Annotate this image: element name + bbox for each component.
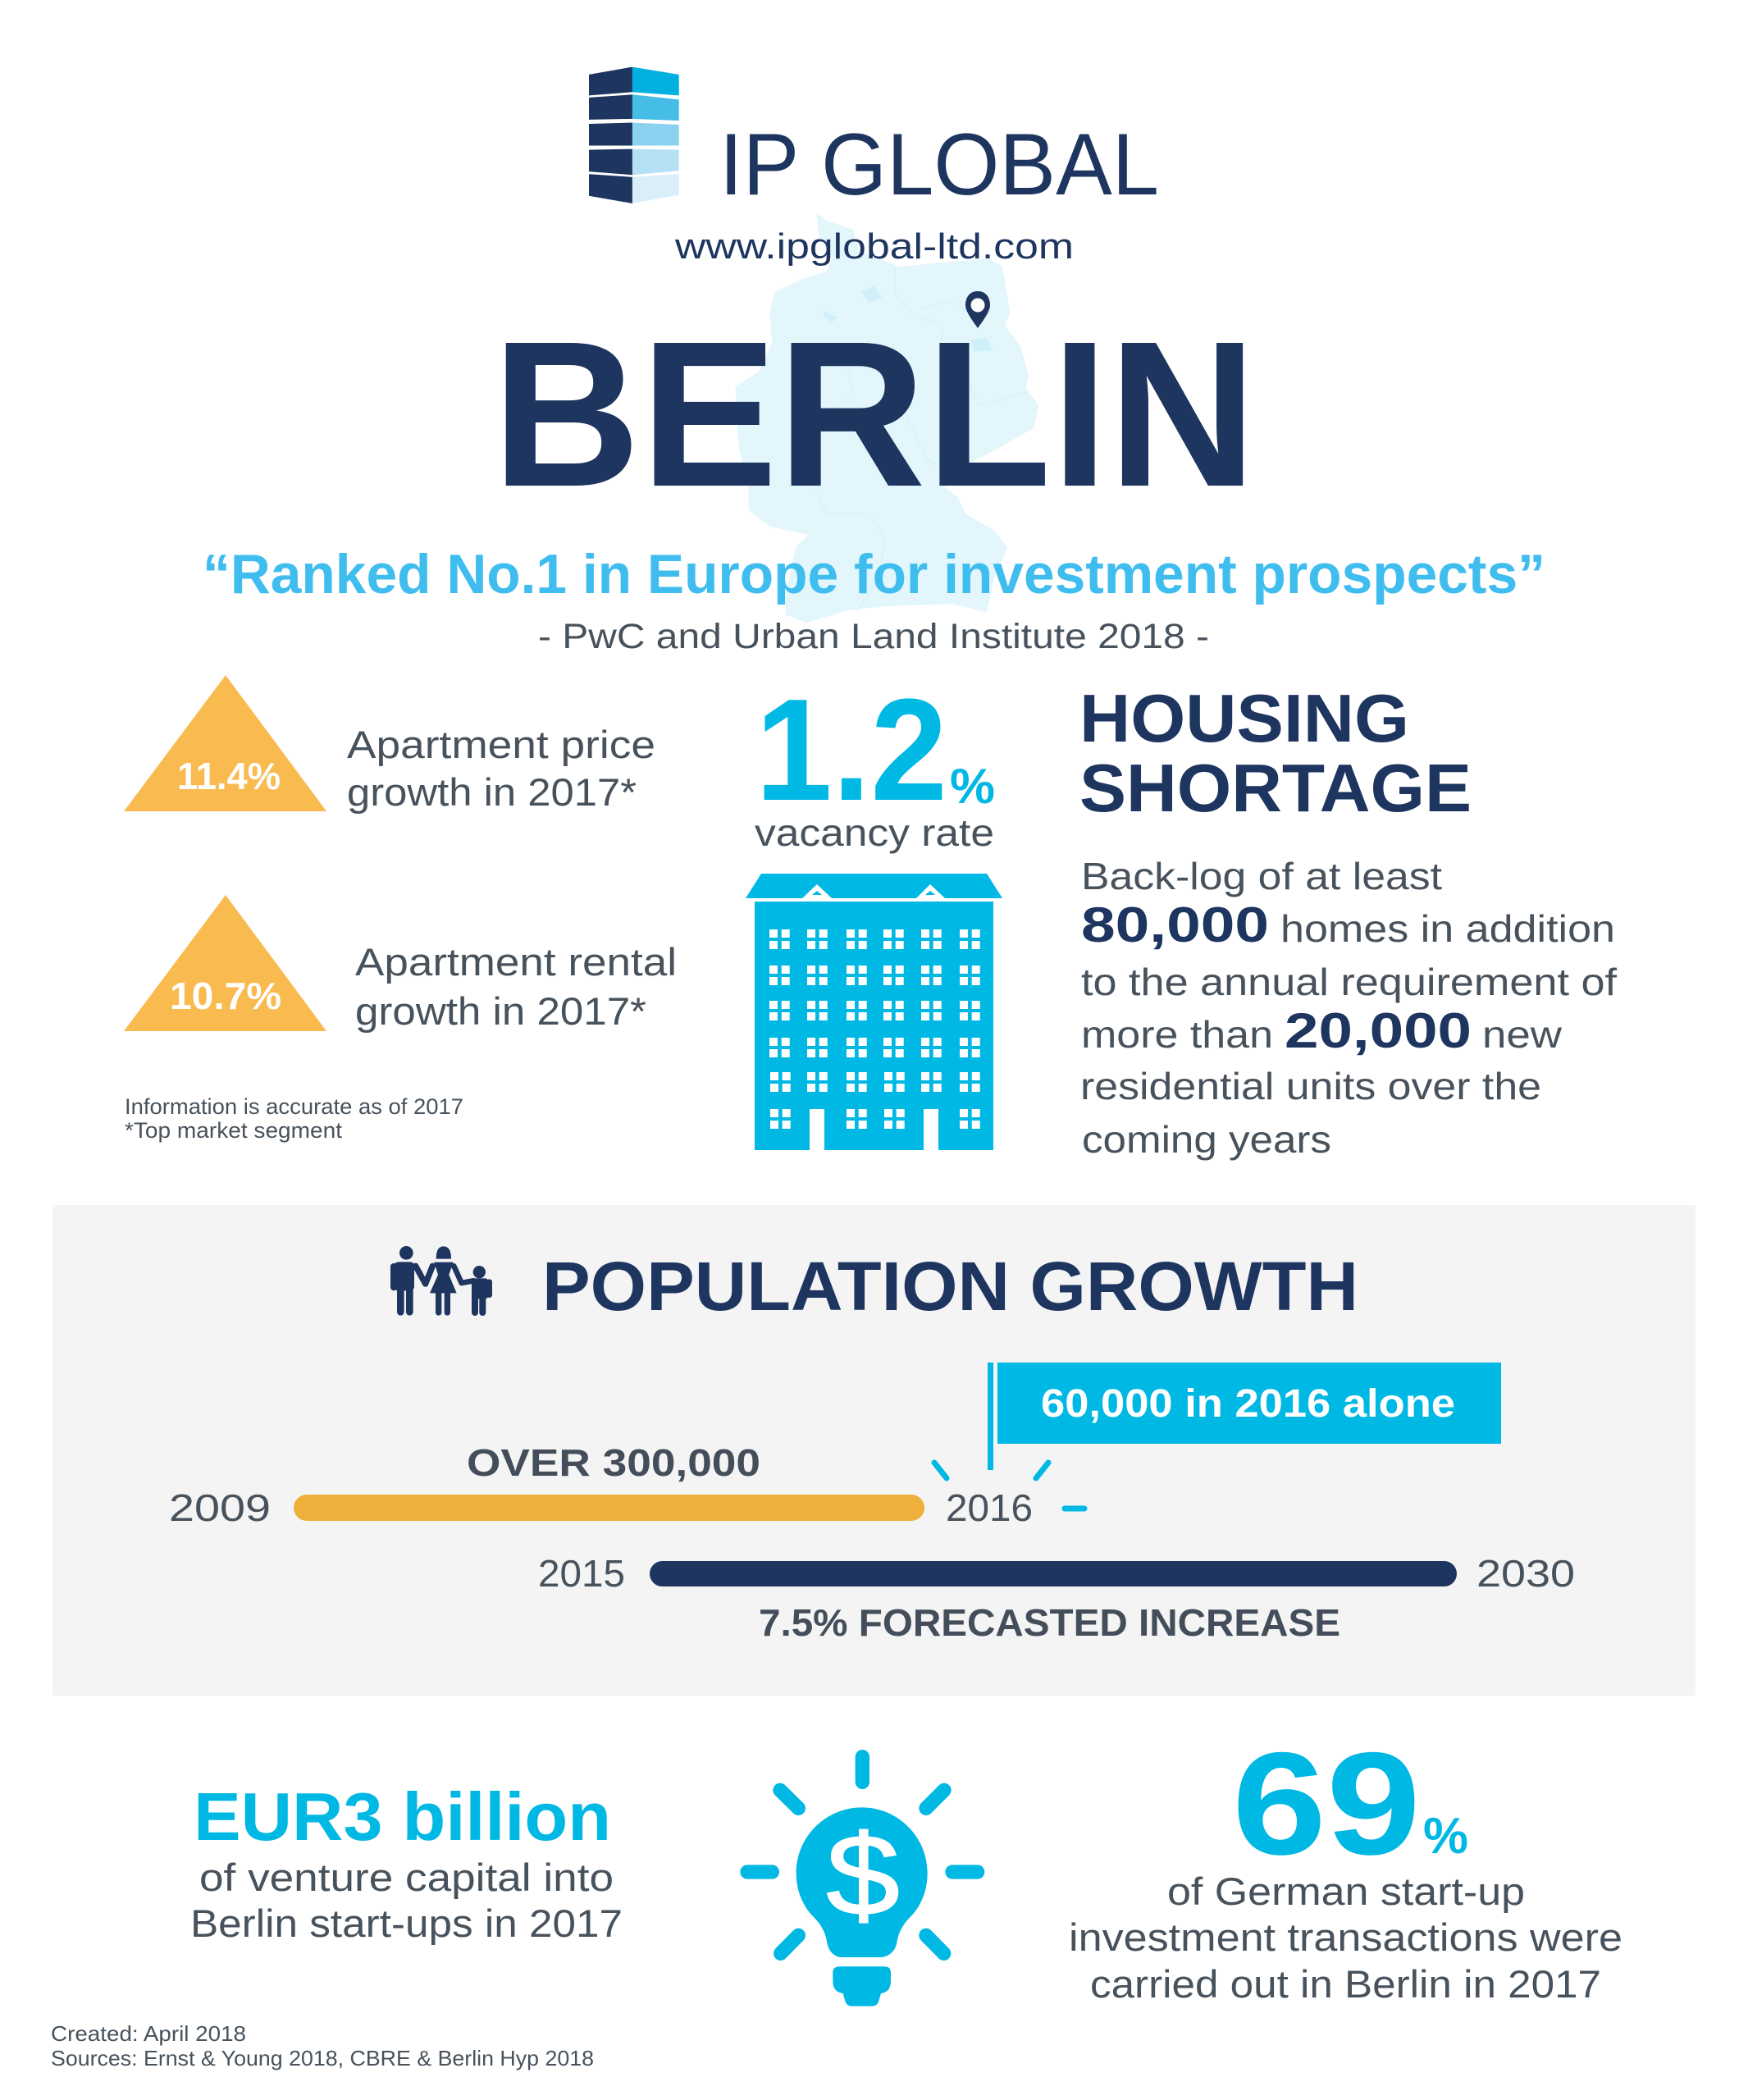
text block: housing shortage body: 80,000 — [1081, 897, 1269, 952]
stat: venture capital: EUR3 billion — [194, 1778, 611, 1855]
footnote — [125, 1094, 463, 1143]
timeline: 2015 to 2030: 2015 — [538, 1552, 625, 1595]
timeline: 2015 to 2030: 7.5% FORECASTED INCREASE — [759, 1601, 1340, 1644]
stat: German start-up share: of German start-up — [1167, 1869, 1525, 1913]
stat: German start-up share: investment transactions were — [1069, 1915, 1622, 1959]
heading: housing shortage: HOUSING — [1079, 680, 1409, 756]
flag: 60,000 in 2016 alone — [988, 1363, 1501, 1470]
stat: venture capital: of venture capital into — [199, 1856, 614, 1899]
panel: population growth — [52, 1205, 1696, 1696]
map of Germany — [736, 212, 1039, 623]
text block: housing shortage body: coming years — [1082, 1118, 1331, 1161]
heading: housing shortage: SHORTAGE — [1079, 750, 1472, 826]
icon: light bulb with dollar: $ — [826, 1810, 900, 1939]
heading: population growth: POPULATION GROWTH — [542, 1248, 1358, 1325]
text block: housing shortage body: to the annual requirement of — [1081, 961, 1617, 1003]
stat: German start-up share: 69 — [1232, 1722, 1421, 1885]
stat: apartment price growth — [124, 675, 655, 814]
text block: housing shortage body: more than — [1081, 1013, 1273, 1056]
stat: apartment price growth: 11.4% — [177, 755, 281, 797]
text block: housing shortage body: residential units over the — [1080, 1065, 1541, 1107]
stat: apartment rental growth: 10.7% — [170, 975, 281, 1017]
stat: apartment price growth: Apartment price — [347, 723, 655, 766]
timeline: 2015 to 2030 — [538, 1552, 1575, 1644]
text block: housing shortage body: 20,000 — [1285, 1003, 1472, 1058]
footer: credits and sources: Created: April 2018 — [51, 2021, 246, 2046]
stat: vacancy rate: 1.2 — [755, 669, 947, 831]
footer: credits and sources — [51, 2021, 594, 2070]
footer: credits and sources: Sources: Ernst & Young 2018, CBRE & Berlin Hyp 2018 — [51, 2046, 594, 2070]
stat: vacancy rate: vacancy rate — [755, 811, 994, 854]
timeline: 2009 to 2016: OVER 300,000 — [467, 1441, 760, 1484]
text block: housing shortage body: homes in addition — [1280, 907, 1615, 950]
stat: German start-up share: % — [1423, 1808, 1468, 1865]
icon: apartment building — [746, 874, 1002, 1150]
highlight rays around 2016 — [934, 1463, 1084, 1509]
quote source: - PwC and Urban Land Institute 2018 - — [538, 617, 1209, 656]
stat: apartment price growth: growth in 2017* — [347, 770, 637, 814]
logo wordmark: IP GLOBAL — [719, 115, 1159, 213]
icon: light bulb with dollar — [747, 1757, 978, 2006]
icon: family — [394, 1246, 490, 1312]
stat: apartment rental growth — [124, 895, 677, 1033]
stat: venture capital: Berlin start-ups in 2017 — [190, 1901, 623, 1945]
stat: apartment rental growth: growth in 2017* — [355, 989, 646, 1033]
stat: German start-up share — [1069, 1722, 1622, 2006]
timeline: 2009 to 2016 — [169, 1441, 1033, 1529]
text block: housing shortage body: Back-log of at least — [1081, 855, 1442, 897]
stat: vacancy rate: % — [950, 759, 995, 814]
quote: “Ranked No.1 in Europe for investment prospects” — [203, 543, 1545, 605]
timeline: 2009 to 2016: 2016 — [946, 1486, 1033, 1529]
title: BERLIN — [492, 298, 1257, 530]
text block: housing shortage body: new — [1482, 1013, 1563, 1056]
footnote: Information is accurate as of 2017 — [125, 1094, 463, 1119]
flag: 60,000 in 2016 alone: 60,000 in 2016 alone — [1041, 1382, 1455, 1426]
stat: venture capital — [190, 1778, 623, 1945]
heading: housing shortage — [1079, 680, 1472, 826]
website: www.ipglobal-ltd.com — [674, 226, 1074, 267]
logo: IP Global tower — [589, 67, 679, 203]
stat: German start-up share: carried out in Berlin in 2017 — [1090, 1962, 1601, 2006]
icon: location pin — [965, 291, 990, 328]
timeline: 2015 to 2030: 2030 — [1476, 1552, 1575, 1595]
text block: housing shortage body — [1080, 855, 1617, 1161]
timeline: 2009 to 2016: 2009 — [169, 1486, 271, 1529]
footnote: *Top market segment — [125, 1118, 343, 1143]
stat: apartment rental growth: Apartment rental — [355, 940, 677, 984]
